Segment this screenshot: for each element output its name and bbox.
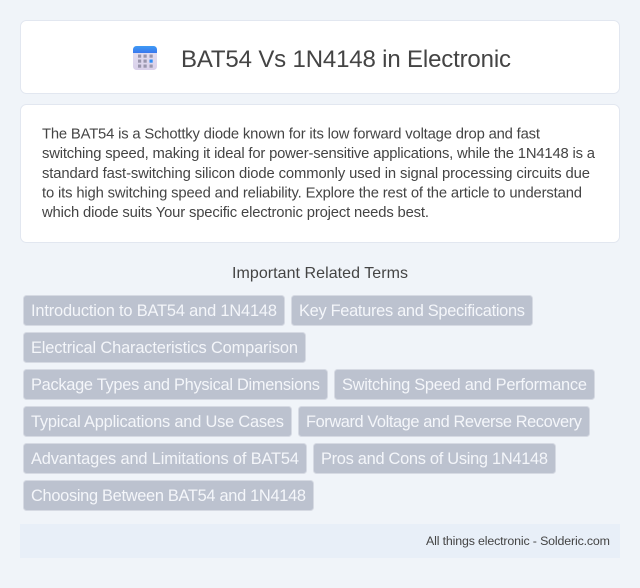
tag list bbox=[24, 296, 594, 510]
tag list: Advantages and Limitations of BAT54 bbox=[31, 450, 299, 468]
heading: important related terms: Important Related Terms bbox=[232, 265, 408, 282]
tag list: Key Features and Specifications bbox=[299, 302, 525, 320]
panel: intro paragraph: The BAT54 is a Schottky diode known for its low forward voltage drop and fast bbox=[42, 126, 540, 142]
tag list: Forward Voltage and Reverse Recovery bbox=[306, 413, 583, 431]
icon: calendar bbox=[133, 46, 157, 70]
tag list: Electrical Characteristics Comparison bbox=[31, 339, 298, 357]
footer: All things electronic - Solderic.com bbox=[426, 534, 610, 548]
footer bbox=[20, 524, 620, 558]
tag list: Package Types and Physical Dimensions bbox=[31, 376, 320, 394]
tag list: Choosing Between BAT54 and 1N4148 bbox=[31, 487, 306, 505]
tag list: Pros and Cons of Using 1N4148 bbox=[321, 450, 548, 468]
tag list: Introduction to BAT54 and 1N4148 bbox=[31, 302, 277, 320]
title: BAT54 Vs 1N4148 in Electronic bbox=[181, 46, 511, 73]
tag list: Switching Speed and Performance bbox=[342, 376, 587, 394]
panel: intro paragraph: switching speed, making it ideal for power-sensitive applications, while the 1N4148 is a bbox=[42, 146, 596, 162]
tag list: Typical Applications and Use Cases bbox=[31, 413, 284, 431]
panel: intro paragraph: standard fast-switching silicon diode commonly used in signal processing circuits due bbox=[42, 166, 590, 182]
panel: intro paragraph bbox=[20, 104, 620, 242]
panel: header bbox=[20, 20, 620, 94]
panel: intro paragraph: which diode suits Your specific electronic project needs best. bbox=[41, 205, 429, 221]
panel: intro paragraph: to its high switching speed and reliability. Explore the rest of the article to understand bbox=[42, 186, 582, 202]
